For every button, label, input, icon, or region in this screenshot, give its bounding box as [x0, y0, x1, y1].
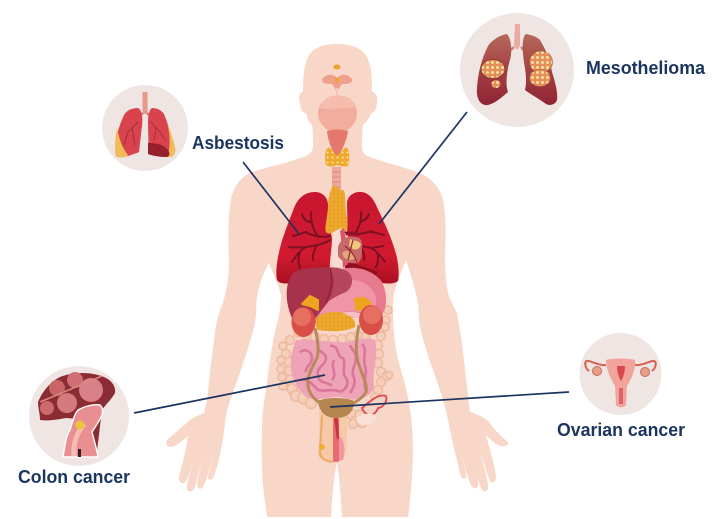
- trachea: [332, 167, 341, 191]
- ureters: [308, 325, 366, 405]
- uterus illustration: [585, 358, 656, 407]
- mesothelioma lungs: [477, 24, 557, 105]
- reproductive organs: [318, 408, 347, 462]
- colon illustration: [38, 372, 115, 457]
- brain and pituitary: [322, 64, 352, 98]
- colon beads: [277, 306, 392, 428]
- mesothelioma circle: [460, 13, 574, 127]
- lungs: [276, 192, 399, 284]
- line: mesothelioma: [379, 112, 467, 224]
- bronchi: [289, 212, 385, 268]
- bladder: [318, 398, 354, 418]
- thyroid: [325, 147, 349, 166]
- human body silhouette: [166, 44, 508, 517]
- ovarian cancer circle: [580, 333, 662, 415]
- label: colon cancer: Colon cancer: [18, 467, 130, 487]
- label: mesothelioma: Mesothelioma: [586, 58, 706, 78]
- heart: [332, 228, 362, 270]
- pancreas: [316, 312, 355, 331]
- asbestosis circle: [102, 85, 188, 171]
- adrenal glands: [302, 296, 371, 310]
- colon cancer circle: [29, 366, 129, 466]
- kidneys: [292, 305, 383, 337]
- pharynx and oesophagus: [318, 96, 357, 156]
- asbestosis lungs: [115, 92, 175, 157]
- label: ovarian cancer: Ovarian cancer: [557, 420, 685, 440]
- liver and stomach: [287, 267, 386, 328]
- line: colon cancer: [134, 375, 325, 413]
- label: asbestosis: Asbestosis: [192, 133, 284, 153]
- thymus: [325, 186, 348, 233]
- ovary: [356, 395, 386, 425]
- line: asbestosis: [243, 162, 299, 234]
- small intestine: [291, 338, 376, 400]
- line: ovarian cancer: [330, 392, 569, 407]
